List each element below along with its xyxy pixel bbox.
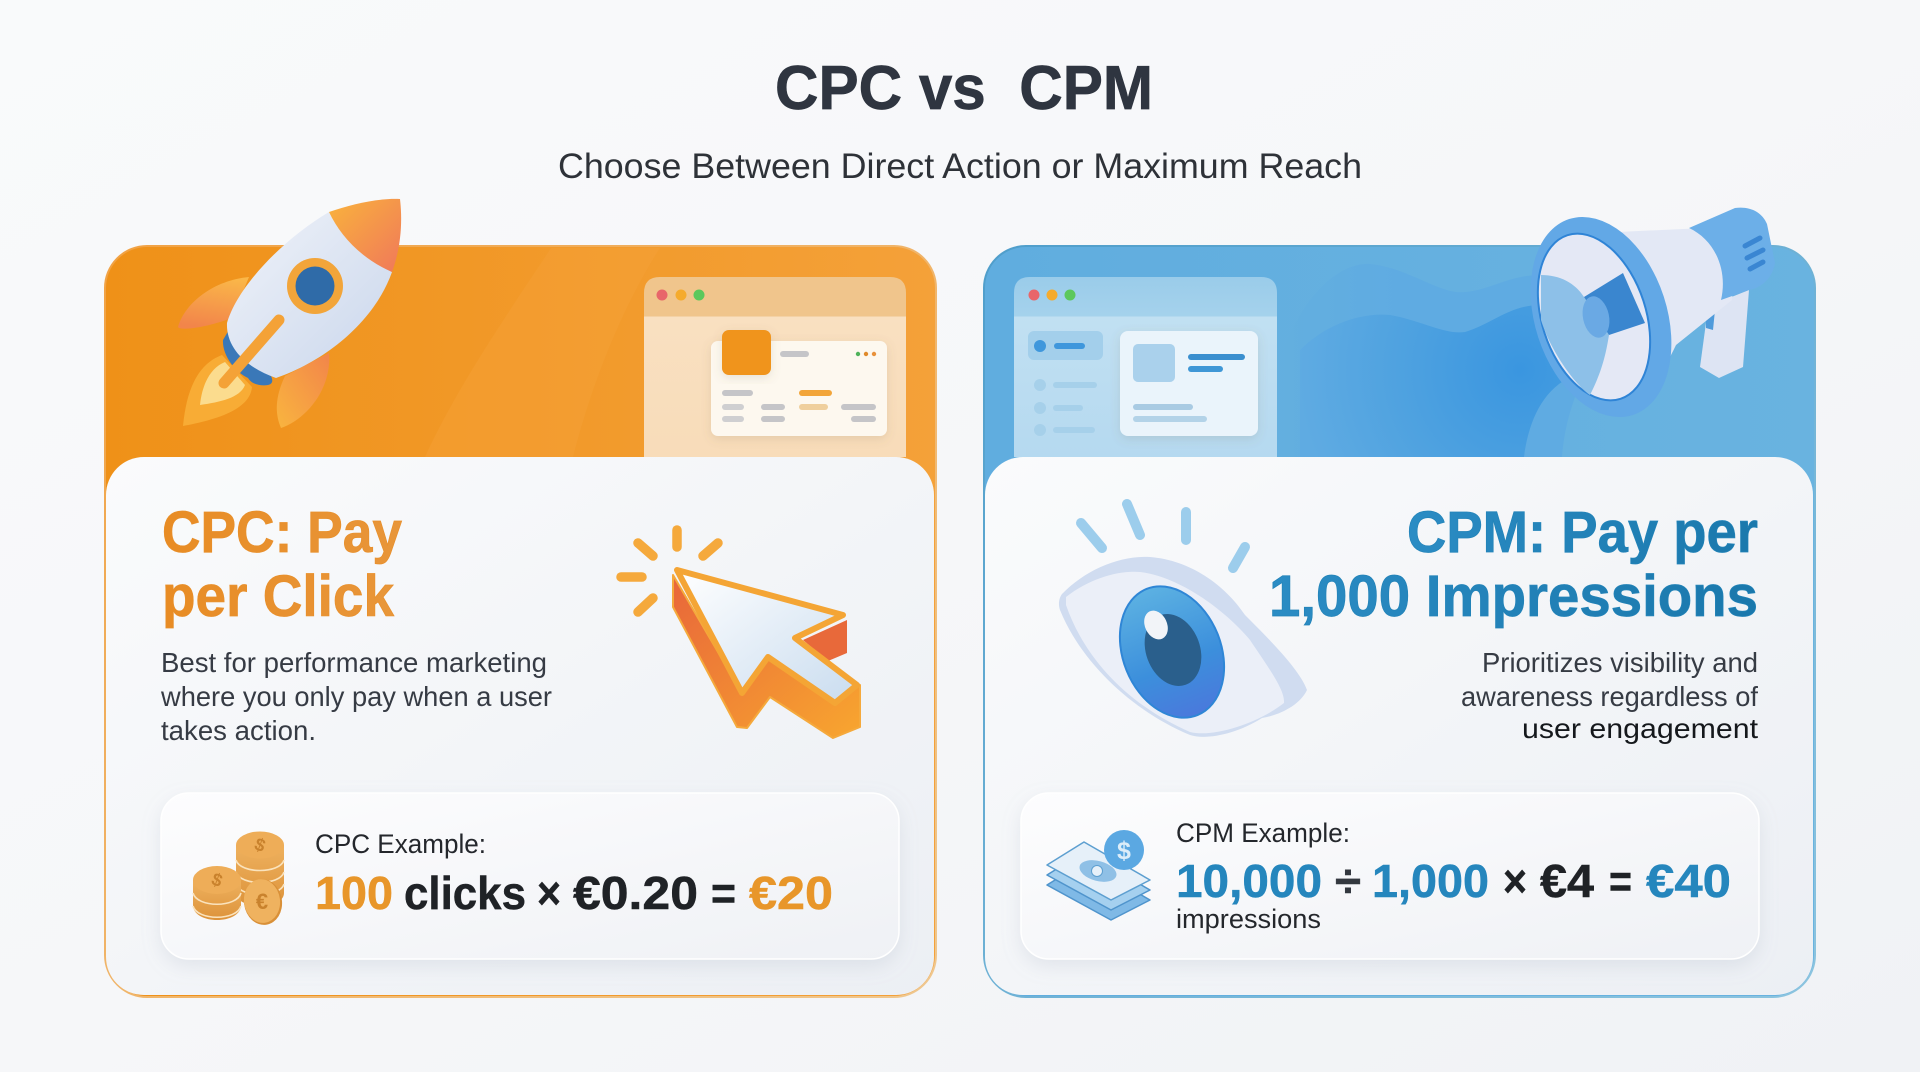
CPM formula: 1,000 [1372,855,1489,907]
CPM description: user engagement [1522,713,1758,744]
CPM formula [1176,855,1731,907]
CPC browser window illustration [644,277,906,457]
CPC formula: clicks [404,867,526,919]
icon: eye with rays [1059,504,1307,737]
CPM browser window illustration [1014,277,1277,457]
CPM formula: €4 [1540,855,1594,907]
icon: banknote stack with coin: $ [1117,837,1131,865]
CPC heading: CPC: Pay [162,500,402,565]
CPC description: Best for performance marketing [161,647,547,678]
CPM formula: 10,000 [1176,855,1322,907]
icon: coins: $ [252,834,268,856]
impressions caption: impressions [1176,904,1321,934]
CPC formula: = [711,867,736,919]
CPM white content panel [985,457,1813,995]
CPM formula: €40 [1646,855,1731,907]
CPC header decoration [425,248,660,457]
CPC formula: 100 [315,867,393,919]
CPM description [1461,647,1758,744]
subtitle: Choose Between Direct Action or Maximum Reach [558,147,1362,186]
CPM card frame [984,246,1815,997]
CPM formula: = [1609,855,1632,907]
CPM heading: CPM: Pay per [1407,500,1758,565]
CPC formula: × [537,867,561,919]
CPM example box [1021,793,1759,959]
icon: rocket [178,199,401,428]
CPC description [160,647,552,746]
CPM header wave decoration [1320,306,1562,457]
icon: coins [193,832,285,927]
panel: CPC [105,199,936,997]
CPC example box [161,793,899,959]
CPM description: awareness regardless of [1461,681,1758,712]
icon: coins: $ [209,869,225,891]
CPC formula [315,867,833,919]
CPC heading: per Click [162,564,395,629]
icon: mouse cursor with click rays [621,530,860,738]
title: CPC vs CPM [775,54,1153,123]
CPM formula: ÷ [1335,855,1361,907]
CPC description: takes action. [161,715,316,746]
CPM formula: × [1503,855,1527,907]
CPC formula: €0.20 [573,867,698,919]
CPM example label: CPM Example: [1176,818,1350,848]
CPM description: Prioritizes visibility and [1482,647,1758,678]
CPC example label: CPC Example: [315,829,486,859]
CPC formula: €20 [749,867,833,919]
panel: CPM [984,199,1815,997]
icon: megaphone [1506,199,1775,435]
CPM heading [1269,500,1758,629]
icon: coins: € [256,889,268,914]
CPC heading [162,500,402,629]
CPM heading: 1,000 Impressions [1269,564,1758,629]
CPC white content panel [106,457,934,995]
icon: banknote stack with coin [1047,830,1150,920]
CPC card frame [105,246,936,997]
CPC description: where you only pay when a user [160,681,552,712]
